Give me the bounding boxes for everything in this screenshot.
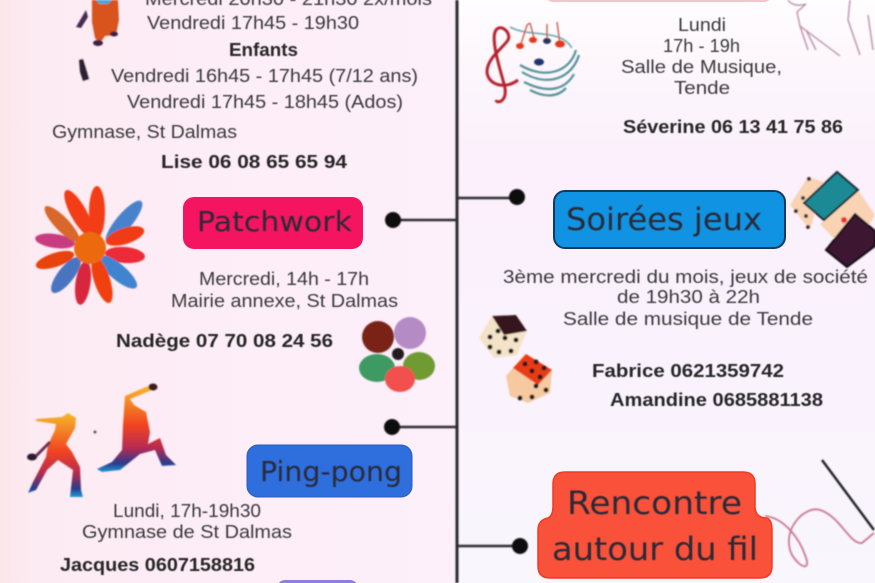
panel: soirées jeux: de 19h30 à 22h: [617, 286, 760, 307]
contact: Nadège: Nadège 07 70 08 24 56: [116, 331, 333, 351]
next heading button: cut-off: [277, 580, 358, 583]
icon: table tennis players: [27, 384, 176, 497]
subheading: Enfants: Enfants: [229, 40, 298, 60]
contacts: Fabrice and Amandine: [592, 361, 823, 410]
schedule lines: Lundi, 17h-19h30: [113, 500, 261, 521]
panel: music: Salle de Musique,: [621, 56, 782, 77]
contact: Lise: Lise 06 08 65 65 94: [161, 152, 347, 172]
central timeline with connectors: [392, 0, 520, 583]
panel: dance schedule: Vendredi 17h45 - 18h45 (Ados): [127, 91, 403, 112]
heading button: Rencontre autour du fil: [538, 472, 772, 578]
icon: needle and thread: [765, 460, 874, 566]
panel: ping-pong: [27, 384, 412, 583]
heading button: Ping-pong: Ping-pong: [260, 455, 402, 488]
heading button: Soirées jeux: [554, 191, 785, 248]
icon: dancer sketch: [788, 0, 873, 56]
panel: dance schedule: Gymnase, St Dalmas: [52, 121, 237, 142]
panel: patchwork: [34, 186, 435, 392]
panel: music: [487, 0, 873, 137]
schedule lines: 3ème mercredi du mois, jeux de société: [503, 266, 868, 287]
panel: soirées jeux: [479, 172, 875, 410]
schedule lines: Mercredi, 14h - 17h: [199, 268, 369, 289]
heading button: Ping-pong: [247, 445, 412, 497]
heading button: Soirées jeux: Soirées jeux: [566, 202, 762, 238]
schedule lines: Lundi: [678, 14, 726, 35]
contact: Séverine: Séverine 06 13 41 75 86: [623, 117, 843, 137]
panel: dance schedule: Vendredi 17h45 - 19h30: [147, 12, 359, 33]
panel: dance schedule: [52, 0, 432, 172]
icon: patchwork daisy: [34, 186, 147, 306]
icon: fabric flower: [359, 317, 435, 392]
panel: dance schedule: Vendredi 16h45 - 17h45 (7/12 ans): [111, 65, 418, 86]
panel: music: 17h - 19h: [663, 35, 740, 56]
contacts: Fabrice and Amandine: Amandine 0685881138: [610, 390, 823, 410]
panel: soirées jeux: Salle de musique de Tende: [563, 308, 813, 329]
background: right side: [457, 0, 875, 583]
icon: treble clef with staff: [487, 22, 579, 102]
heading button: Patchwork: Patchwork: [197, 205, 353, 238]
heading button: top cut-off: [545, 0, 772, 2]
icon: dancer: [76, 0, 119, 81]
heading button: Patchwork: [183, 197, 363, 249]
icon: dice: [479, 315, 552, 403]
heading button: Rencontre autour du fil: Rencontre: [567, 484, 742, 522]
timeline dots: [384, 189, 528, 554]
icon: dominoes: [790, 172, 875, 267]
background: left side: [0, 0, 457, 583]
heading button: Rencontre autour du fil: autour du fil: [552, 530, 758, 568]
contact: Jacques: Jacques 0607158816: [60, 555, 255, 575]
panel: patchwork: Mairie annexe, St Dalmas: [171, 290, 398, 311]
panel: ping-pong: Gymnase de St Dalmas: [82, 521, 292, 542]
panel: rencontre autour du fil: [538, 460, 874, 578]
panel: music: Tende: [674, 77, 730, 98]
contacts: Fabrice and Amandine: Fabrice 0621359742: [592, 361, 784, 381]
